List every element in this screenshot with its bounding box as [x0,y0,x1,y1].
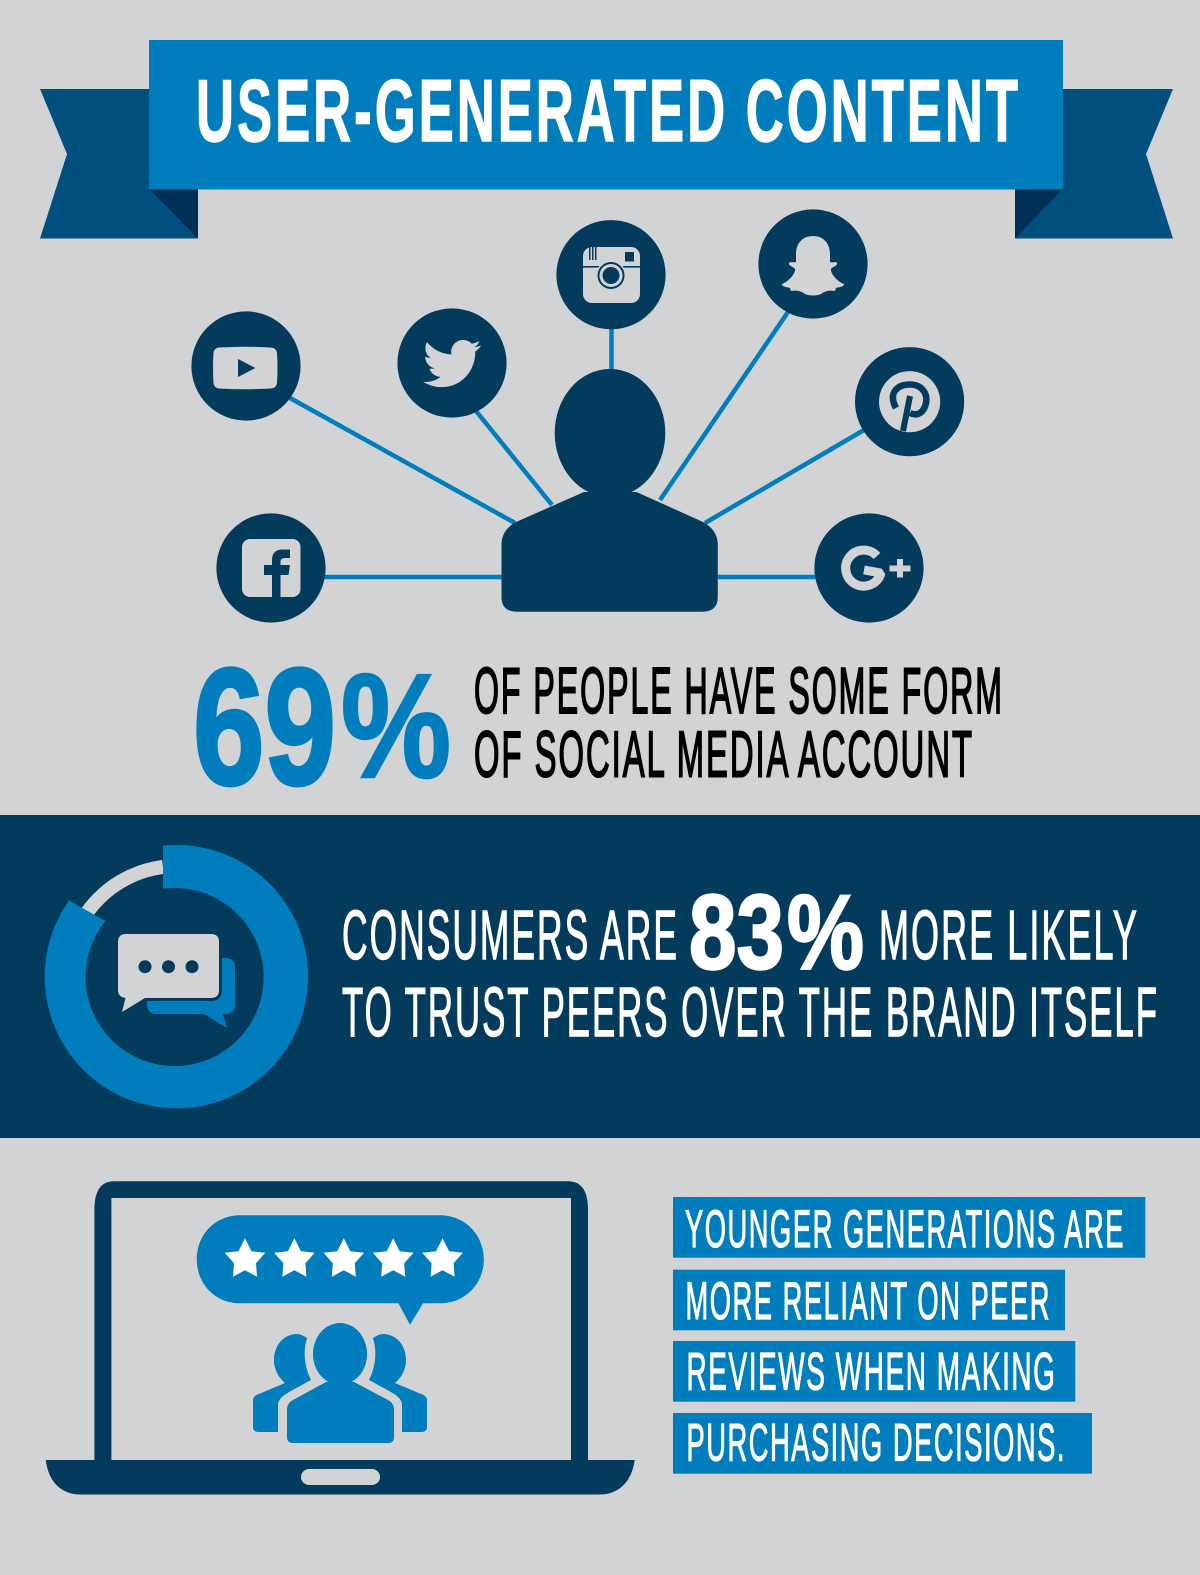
connector lines [290,312,864,577]
illustration: laptop with reviews [46,1181,635,1494]
stat: 69 percent [193,635,1004,820]
highlight bars [673,1197,1145,1474]
icon: twitter [397,308,507,418]
speech bubble with stars [197,1215,484,1325]
social network diagram [191,209,964,623]
trust statement: CONSUMERS ARE [342,896,679,974]
laptop [46,1181,635,1494]
icon: chat bubbles [118,934,235,1028]
banner panel [149,40,1063,190]
person silhouette [502,369,718,612]
callout: younger generations [673,1197,1145,1474]
big number: 69 [193,635,336,820]
icon: group of people [253,1323,427,1443]
left ribbon tail [40,89,198,238]
big number: % [341,644,451,809]
callout text [685,1200,1125,1473]
donut chart [45,845,308,1108]
trust statement [342,874,1159,1051]
panel: trust band [0,815,1200,1138]
trust statement: % [787,874,864,992]
icon: facebook [216,513,326,623]
title banner [40,40,1173,238]
icon: pinterest [855,347,964,456]
trust statement: 83 [689,874,784,992]
icon: instagram [556,220,666,329]
statement text [474,654,1004,790]
icon: snapchat [758,209,868,319]
right ribbon tail [1015,89,1173,238]
icon: google plus [814,513,924,623]
icon: youtube [191,311,301,421]
